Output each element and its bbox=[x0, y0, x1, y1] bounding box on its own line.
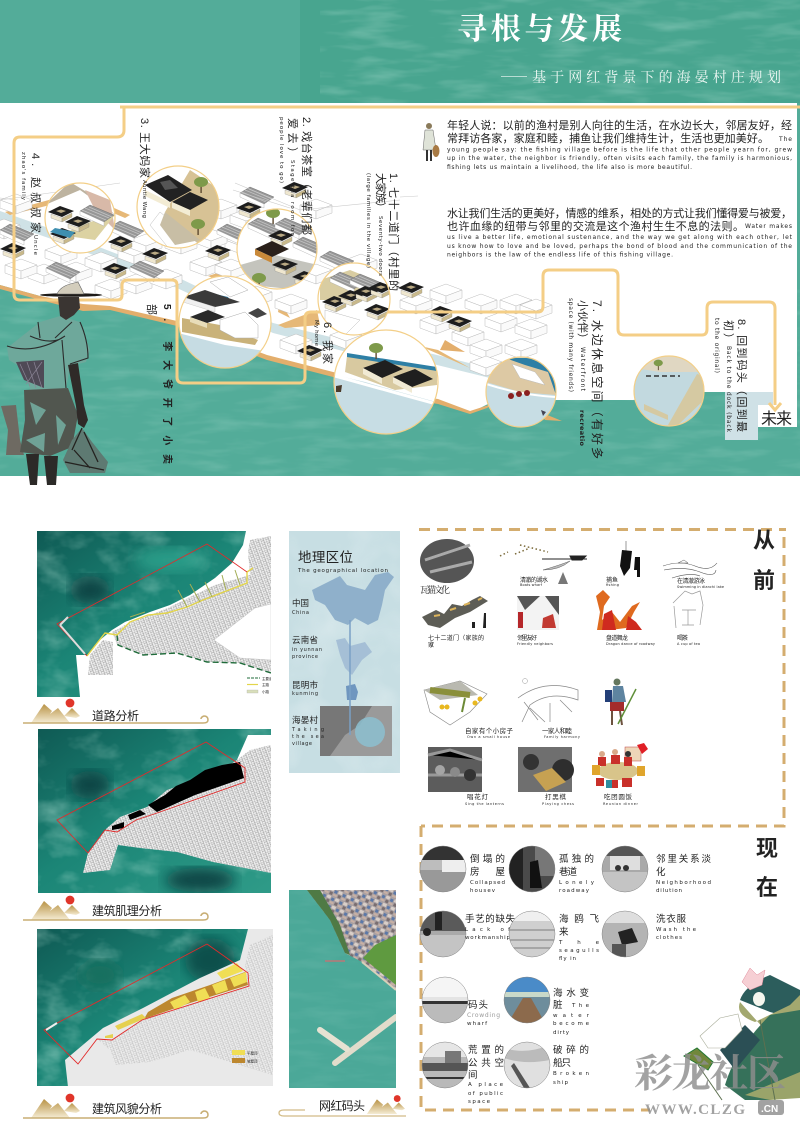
vertical label 7: 小伙伴） bbox=[576, 300, 589, 344]
vertical label 4: zhao's family bbox=[20, 152, 26, 201]
caption: neighborhood dilution: 化 bbox=[656, 866, 666, 878]
map: Kunming bbox=[346, 684, 358, 700]
vertical label 8: 初） bbox=[722, 320, 736, 344]
yellow road bbox=[87, 568, 253, 656]
vertical label 1: 1. 七十二道门（村里的 bbox=[387, 173, 401, 291]
circle detail G bbox=[486, 357, 556, 427]
vertical label 6: 6. 我家 bbox=[321, 322, 335, 364]
black building fabric bbox=[148, 762, 244, 812]
photo circle: broken ship bbox=[504, 1042, 550, 1088]
legend bbox=[246, 676, 271, 694]
map: Yunnan bbox=[336, 638, 372, 675]
vertical label 1 bbox=[365, 173, 401, 291]
future label: 未来 bbox=[761, 410, 792, 428]
photo circle: dirty water bbox=[504, 977, 550, 1023]
caption: crowding wharf: 码头 bbox=[468, 999, 488, 1011]
text block: young people say: 常拜访各家，家庭和睦，捕鱼让我们维持生计，生活也更加美好。 bbox=[447, 131, 769, 145]
item: sing the lanterns bbox=[428, 747, 504, 806]
head bbox=[58, 297, 80, 320]
item: sing the lanterns: 唱花灯 bbox=[467, 792, 488, 801]
item: reunion dinner bbox=[592, 743, 648, 806]
labels: 昆明市 bbox=[292, 680, 318, 690]
item: friendly neighbors bbox=[517, 596, 559, 646]
text block: young people say: The bbox=[778, 136, 792, 143]
vertical label 5: 部 bbox=[145, 304, 159, 315]
item: tile cat culture bbox=[420, 539, 474, 596]
text block: water makes life better: 水让我们生活的更美好，情感的维系，相处的方式让我们懂得爱与被爱， bbox=[447, 206, 792, 220]
item: swimming bbox=[663, 560, 724, 589]
item: fishing: fishing bbox=[606, 583, 619, 587]
item: friendly neighbors: 邻里友好 bbox=[517, 634, 537, 642]
shorts bbox=[20, 388, 78, 456]
photo circle: lack of workmanship bbox=[420, 911, 466, 957]
hat bbox=[40, 293, 102, 297]
item: own small house bbox=[424, 681, 514, 739]
heading: past bbox=[753, 528, 775, 593]
vertical label 1: (large families in the village) bbox=[365, 173, 371, 268]
figure: fisherman bbox=[1, 282, 108, 485]
circle detail A bbox=[45, 182, 115, 253]
shirt sketch bbox=[7, 316, 90, 390]
caption: washing clothes: 洗衣服 bbox=[656, 913, 686, 925]
item: dragon dance: Dragon dance of roadway bbox=[606, 642, 655, 646]
legend: 平屋顶 bbox=[247, 1050, 258, 1056]
text block: water makes life better: neighbors is the law of the endless life of this fishing village. bbox=[447, 252, 673, 258]
text block: water makes life better: us know how to love and be loved, perhaps the bond of blood and the communication of the bbox=[447, 243, 792, 250]
caption: dirty water: The bbox=[571, 1003, 590, 1009]
vertical label 3: 3. 王大妈家 bbox=[138, 118, 152, 178]
street hatch bbox=[112, 536, 271, 673]
caption: washing clothes bbox=[656, 913, 697, 941]
caption: dirty water bbox=[553, 987, 590, 1036]
caption: idle public space: A place bbox=[468, 1082, 504, 1088]
item: fishing bbox=[606, 541, 640, 587]
vertical label 2: people love to go) bbox=[278, 117, 284, 183]
circle detail D bbox=[318, 263, 394, 335]
title: 地理区位 bbox=[298, 550, 353, 565]
heading: building style bbox=[23, 1094, 208, 1118]
item: seventy-two doors: 家） bbox=[428, 641, 437, 649]
heading: building texture bbox=[23, 896, 208, 920]
labels: 海晏村 bbox=[292, 715, 318, 725]
vertical label 3 bbox=[138, 118, 152, 218]
grey roof houses bbox=[0, 187, 354, 283]
caption: idle public space bbox=[468, 1044, 504, 1105]
panel: white village ground bbox=[0, 103, 797, 413]
title: 寻根与发展 bbox=[457, 4, 622, 48]
caption: collapsed houses: 倒塌的 bbox=[470, 853, 505, 865]
caption: seagulls: 海鸥飞 bbox=[559, 913, 599, 925]
red boundary bbox=[57, 544, 247, 656]
item: seventy-two doors bbox=[422, 596, 488, 649]
photo circle: idle public space bbox=[422, 1042, 468, 1088]
map: road analysis bbox=[37, 531, 276, 697]
caption: lonely roadway: 巷道 bbox=[559, 866, 577, 878]
item: cup of tea bbox=[673, 591, 703, 646]
caption: lack of workmanship bbox=[465, 913, 515, 941]
caption: crowding wharf: Crowding bbox=[467, 1012, 500, 1019]
green dashed road bbox=[117, 635, 271, 673]
vertical label 7 bbox=[567, 298, 605, 459]
vertical label 6: My home bbox=[313, 320, 319, 347]
arm bbox=[68, 363, 88, 428]
left bag bbox=[1, 405, 24, 455]
item: fishing: 捕鱼 bbox=[606, 576, 618, 584]
labels bbox=[291, 598, 324, 747]
vertical label 7: 7. 水边休息空间（有好多 bbox=[590, 300, 605, 459]
item: seventy-two doors: 七十二道门（家族的 bbox=[428, 634, 484, 642]
item: clear lake bbox=[500, 545, 587, 587]
caption: dirty water: 海水变 bbox=[553, 987, 589, 999]
text block: water makes life better bbox=[447, 206, 793, 258]
watermark: 彩龙社区 bbox=[634, 1043, 786, 1099]
caption: crowding wharf: wharf bbox=[467, 1021, 488, 1027]
caption: broken ship: Broken bbox=[553, 1071, 590, 1077]
right bag bbox=[63, 428, 108, 473]
caption: crowding wharf bbox=[467, 999, 500, 1027]
panel: future box bbox=[758, 392, 797, 427]
heading: building texture: 建筑肌理分析 bbox=[92, 903, 162, 918]
connector bbox=[349, 620, 351, 735]
labels: China bbox=[292, 610, 309, 616]
icon: old villager bbox=[423, 123, 440, 161]
orange lanes bbox=[5, 192, 470, 368]
photo: influencer dock bbox=[289, 890, 396, 1088]
net basket bbox=[16, 360, 44, 388]
item: swimming: Swimming in dianchi lake bbox=[677, 585, 724, 589]
canal bbox=[0, 211, 497, 378]
item: family harmony: Family harmony bbox=[544, 735, 580, 739]
heading: building style: 建筑风貌分析 bbox=[92, 1101, 162, 1116]
item: own small house: Own a small house bbox=[467, 735, 510, 739]
caption: dirty water: 脏 bbox=[553, 999, 563, 1011]
vertical label 1: Seventy-two doors bbox=[377, 216, 383, 276]
vertical label 7: recreatio bbox=[578, 410, 586, 447]
lotus flower white bbox=[700, 1014, 742, 1048]
text block: water makes life better: 也许血缘的纽带与邻里的交流是这个渔村生生不息的法则。 bbox=[447, 219, 744, 233]
caption: seagulls: The bbox=[558, 940, 600, 946]
caption: lack of workmanship: 手艺的缺失 bbox=[465, 913, 515, 925]
photo circle: lonely roadway bbox=[509, 846, 558, 892]
caption: idle public space: 公共空 bbox=[468, 1057, 504, 1069]
item: reunion dinner: 吃团圆饭 bbox=[604, 792, 632, 801]
item: sing the lanterns: Sing the lanterns bbox=[465, 802, 504, 806]
caption: seagulls: seagulls bbox=[559, 948, 599, 954]
item: family harmony: 一家人和睦 bbox=[542, 726, 572, 735]
dark roof houses bbox=[0, 182, 472, 361]
text block: young people say: 年轻人说：以前的渔村是别人向往的生活，在水边长大，邻居友好，经 bbox=[447, 118, 792, 132]
watermark: WWW.CLZG bbox=[645, 1102, 745, 1118]
circle detail C bbox=[237, 208, 327, 290]
circle detail H bbox=[634, 356, 704, 427]
caption: neighborhood dilution bbox=[656, 853, 711, 894]
item: cup of tea: 喝茶 bbox=[677, 634, 688, 642]
item: friendly neighbors: Friendly neighbors bbox=[517, 642, 553, 646]
caption: neighborhood dilution: Neighborhood bbox=[656, 880, 711, 886]
caption: washing clothes: clothes bbox=[656, 935, 682, 941]
caption: lonely roadway bbox=[559, 853, 595, 894]
thin site lines bbox=[0, 183, 418, 210]
caption: lonely roadway: 孤独的 bbox=[559, 853, 594, 865]
caption: idle public space: of public bbox=[468, 1091, 503, 1097]
heading: present: 在 bbox=[756, 875, 778, 900]
village illustration bbox=[0, 182, 562, 421]
subtitle: ——基于网红背景下的海晏村庄规划 bbox=[500, 67, 781, 87]
legend: 主路 bbox=[262, 682, 270, 687]
arrow head bbox=[769, 403, 781, 410]
vertical label 7: Waterfront bbox=[579, 347, 586, 392]
vertical label 8: to the original) bbox=[713, 318, 720, 373]
caption: broken ship: 船只 bbox=[553, 1057, 571, 1069]
caption: broken ship bbox=[553, 1044, 590, 1086]
vertical label 5 bbox=[145, 304, 174, 464]
caption: broken ship: ship bbox=[553, 1080, 568, 1086]
item: swimming: 在清澈游泳 bbox=[677, 577, 705, 585]
caption: collapsed houses bbox=[470, 853, 505, 894]
caption: neighborhood dilution: 邻里关系淡 bbox=[656, 853, 711, 865]
caption: idle public space: space bbox=[468, 1099, 491, 1105]
heading: influencer dock: 网红码头 bbox=[319, 1098, 365, 1113]
caption: seagulls: fly in bbox=[559, 956, 576, 962]
legend bbox=[232, 1050, 258, 1064]
panel: teal sea background bbox=[0, 0, 800, 476]
vertical label 4 bbox=[20, 152, 43, 256]
item: tile cat culture: 瓦猫文化 bbox=[420, 583, 450, 596]
photo circle: neighborhood dilution bbox=[602, 846, 648, 892]
caption: lack of workmanship: Lack of bbox=[465, 927, 511, 933]
text block: water makes life better: Water makes bbox=[745, 223, 792, 230]
text block: young people say: up in the water, the neighbor is friendly, often visits each family, the family is harmonious, bbox=[447, 155, 792, 162]
illustration: lotus bbox=[684, 968, 800, 1100]
item: playing chess: Playing chess bbox=[542, 802, 574, 806]
item: playing chess: 打黑棋 bbox=[545, 792, 566, 801]
caption: collapsed houses: housev bbox=[470, 888, 496, 894]
vertical label 6 bbox=[313, 320, 335, 364]
dashed frame: present bbox=[421, 826, 650, 1110]
legend: 坡屋顶 bbox=[247, 1058, 258, 1064]
labels: village bbox=[292, 741, 312, 747]
caption: neighborhood dilution: dilution bbox=[656, 888, 682, 894]
lotus flower pink bbox=[742, 968, 765, 990]
vertical label 2: 2. 戏台茶室（老辈们都 bbox=[300, 117, 314, 235]
heading: present bbox=[756, 836, 778, 900]
grey village photo bbox=[320, 706, 392, 756]
item: dragon dance bbox=[596, 590, 655, 646]
orange route line bbox=[14, 108, 775, 405]
blue patch behind label 8 bbox=[725, 392, 773, 440]
vertical label 4: Uncle bbox=[32, 235, 38, 256]
watermark: .CN bbox=[761, 1104, 778, 1115]
caption: lonely roadway: Lonely bbox=[559, 880, 595, 886]
item: cup of tea: A cup of tea bbox=[677, 642, 700, 646]
legend: 小路 bbox=[262, 689, 270, 694]
item: clear lake: Boats wharf bbox=[520, 583, 543, 587]
item: dragon dance: 盘道舞龙 bbox=[606, 634, 628, 642]
caption: idle public space: 荒置的 bbox=[468, 1044, 504, 1056]
dashed frame: past bbox=[419, 530, 786, 826]
item: reunion dinner: Reunion dinner bbox=[603, 802, 639, 806]
caption: collapsed houses: 房 屋 bbox=[470, 866, 505, 878]
yellow and brown buildings bbox=[105, 963, 248, 1038]
photo circle: seagulls bbox=[509, 911, 555, 957]
circle detail F bbox=[334, 330, 440, 434]
caption: seagulls: 来 bbox=[559, 927, 569, 938]
map: China bbox=[312, 572, 394, 625]
caption: dirty water: water bbox=[553, 1013, 590, 1019]
vertical label 4: 4. 赵叔叔家 bbox=[29, 153, 43, 233]
vertical label 2: Stage tea room for bbox=[289, 160, 295, 236]
item: family harmony bbox=[518, 678, 580, 739]
item: playing chess bbox=[518, 747, 574, 806]
labels: the sea bbox=[292, 734, 324, 740]
item: clear lake: 清澈的湖水 bbox=[520, 576, 548, 584]
text block: young people say bbox=[447, 118, 792, 171]
vertical label 8: Back to the dock (back bbox=[725, 346, 732, 433]
text block: young people say: young people say: the fishing village before is the life that other people yearn for, grew bbox=[447, 146, 792, 154]
caption: collapsed houses: Collapsed bbox=[470, 880, 505, 886]
caption: dirty water: dirty bbox=[553, 1030, 570, 1036]
text block: water makes life better: us live a better life, emotional sustenance, and the way we get along with each other, let bbox=[447, 234, 793, 241]
map: building style bbox=[37, 929, 273, 1087]
white buildings bbox=[0, 194, 552, 376]
caption: lack of workmanship: workmanship bbox=[465, 935, 510, 941]
circle detail E bbox=[176, 276, 272, 372]
legs bbox=[26, 454, 39, 485]
heading: present: 现 bbox=[756, 836, 778, 861]
heading: influencer dock bbox=[279, 1095, 406, 1116]
vertical label 8 bbox=[713, 318, 748, 433]
labels: 云南省 bbox=[292, 635, 318, 645]
heading: road analysis: 道路分析 bbox=[92, 708, 139, 723]
heading: road analysis bbox=[23, 699, 208, 723]
caption: idle public space: 间 bbox=[468, 1069, 478, 1081]
caption: washing clothes: Wash the bbox=[656, 927, 697, 933]
vertical label 2 bbox=[278, 117, 314, 236]
map: building texture bbox=[38, 729, 271, 893]
photo circle: crowding wharf bbox=[422, 977, 468, 1023]
vertical label 8: 8. 回到码头（回到最 bbox=[735, 319, 748, 432]
text block: young people say: fishing lets us maintain a livelihood, the life also is more beautiful. bbox=[447, 164, 692, 171]
caption: lonely roadway: roadway bbox=[559, 888, 590, 894]
item: fisherman with pack bbox=[605, 678, 636, 725]
heading: past: 前 bbox=[753, 568, 775, 593]
vertical label 5: 5. 李大爷开了小卖 bbox=[161, 304, 174, 464]
orange coast edge bbox=[0, 285, 562, 421]
vertical label 1: 大家族） bbox=[374, 173, 388, 213]
vertical label 2: 爱去） bbox=[286, 118, 299, 158]
legend: 主要道路 bbox=[262, 676, 276, 681]
labels: 中国 bbox=[292, 598, 309, 608]
labels: Taking bbox=[291, 727, 324, 733]
heading: past: 从 bbox=[753, 528, 775, 553]
labels: province bbox=[292, 654, 318, 660]
photo circle: collapsed houses bbox=[420, 846, 466, 892]
item: own small house: 自家有个小房子 bbox=[465, 726, 514, 735]
panel: geographical location: The geographical location bbox=[297, 568, 388, 574]
labels: kunming bbox=[292, 691, 318, 697]
caption: seagulls bbox=[558, 913, 600, 962]
photo circle: washing clothes bbox=[602, 911, 648, 958]
olive lanes bbox=[130, 570, 240, 617]
circle detail B bbox=[137, 166, 220, 250]
panel: geographical location bbox=[289, 531, 400, 773]
white land bbox=[76, 531, 271, 697]
caption: dirty water: become bbox=[553, 1021, 590, 1027]
top orange rule bbox=[120, 106, 800, 108]
vertical label 3: Auntie Wang bbox=[141, 180, 147, 218]
vertical label 7: space (with many friends) bbox=[567, 298, 574, 392]
caption: broken ship: 破碎的 bbox=[553, 1044, 589, 1056]
labels: in yunnan bbox=[292, 647, 322, 653]
